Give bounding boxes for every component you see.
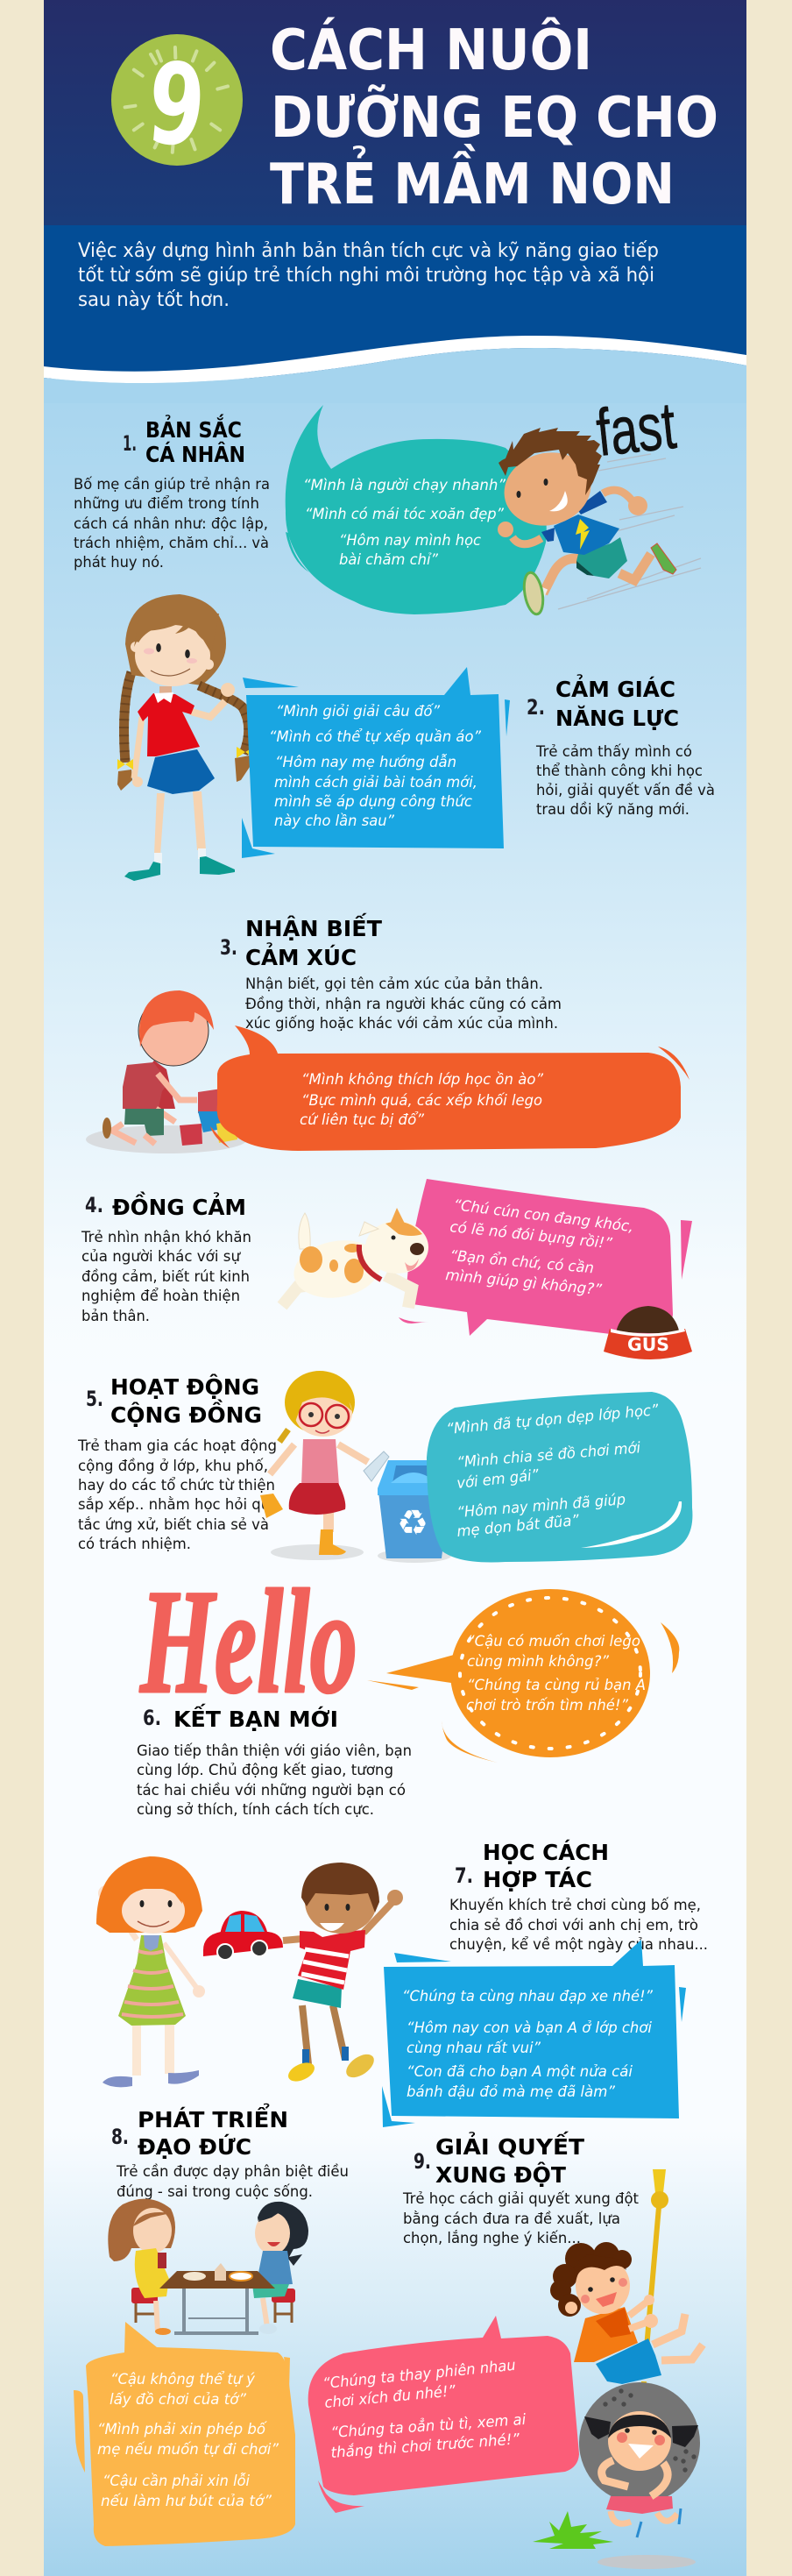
text block 2: hỏi, giải quyết vấn đề và xyxy=(536,781,715,799)
speech bubble pink: có lẽ nó đói bụng rồi!” xyxy=(449,1217,613,1253)
speech bubble amber: “Mình phải xin phép bố xyxy=(97,2420,268,2438)
illustration: running boy xyxy=(496,388,701,615)
speech bubble blue 2 xyxy=(382,1940,686,2127)
text block 6: tác hai chiều với những người bạn có xyxy=(137,1781,406,1799)
intro text: Việc xây dựng hình ảnh bản thân tích cực và kỹ năng giao tiếp xyxy=(78,240,659,262)
text block 4: của người khác với sự xyxy=(81,1248,241,1266)
title: TRẺ MẦM NON xyxy=(270,143,675,217)
text block 6: cùng sở thích, tính cách tích cực. xyxy=(137,1801,374,1819)
text block 9: Trẻ học cách giải quyết xung đột xyxy=(402,2189,639,2208)
heading 7 xyxy=(455,1840,609,1892)
speech bubble orange round: “Cậu có muốn chơi lego xyxy=(467,1632,640,1650)
badge: number 9 xyxy=(111,34,243,173)
text block 6 xyxy=(137,1742,412,1819)
text block 5: hay do các tổ chức từ thiện xyxy=(78,1476,275,1494)
speech bubble blue: “Mình giỏi giải câu đố” xyxy=(276,702,440,720)
text block 5: sắp xếp.. nhằm học hỏi quy xyxy=(78,1495,279,1514)
heading 8 xyxy=(111,2103,288,2160)
text block 7: chuyện, kể về một ngày của nhau... xyxy=(449,1935,708,1954)
heading 3: NHẬN BIẾT xyxy=(245,912,382,941)
text block 5: Trẻ tham gia các hoạt động xyxy=(77,1437,277,1455)
text block 5: cộng đồng ở lớp, khu phố, xyxy=(78,1457,268,1475)
heading 5: CỘNG ĐỒNG xyxy=(110,1399,262,1428)
speech bubble blue: mình cách giải bài toán mới, xyxy=(274,774,477,791)
text block 9: bằng cách đưa ra đề xuất, lựa xyxy=(403,2210,620,2228)
text block 1: những ưu điểm trong tính xyxy=(74,494,259,513)
speech bubble amber: mẹ nếu muốn tự đi chơi” xyxy=(97,2440,279,2459)
speech bubble red pink: “Chúng ta thay phiên nhau xyxy=(322,2357,517,2393)
speech bubble teal 2: với em gái” xyxy=(456,1466,540,1493)
speech bubble blue 2: “Con đã cho bạn A một nửa cái xyxy=(407,2063,633,2081)
speech bubble amber: “Cậu không thể tự ý xyxy=(110,2370,256,2388)
speech bubble teal 2: “Mình chia sẻ đồ chơi mới xyxy=(456,1438,641,1472)
illustration: dog bowl GUS: GUS xyxy=(627,1334,669,1355)
title xyxy=(270,17,718,217)
text block 1 xyxy=(74,475,270,571)
heading 5: 5. xyxy=(86,1387,103,1411)
speech bubble teal 2 xyxy=(427,1392,692,1562)
text block 5 xyxy=(77,1437,279,1553)
text block 7 xyxy=(449,1896,708,1954)
speech bubble amber: “Cậu cần phải xin lỗi xyxy=(103,2472,250,2490)
heading 4: 4. xyxy=(85,1193,103,1217)
panel: 1 ban sac ca nhan xyxy=(74,388,701,615)
text block 6: cùng lớp. Chủ động kết giao, tương xyxy=(137,1761,393,1779)
speech bubble teal: “Mình có mái tóc xoăn đẹp” xyxy=(305,506,504,523)
speech bubble teal 2: mẹ dọn bát đũa” xyxy=(456,1512,580,1541)
speech bubble pink xyxy=(399,1179,692,1338)
text block 2: trau dồi kỹ năng mới. xyxy=(536,800,689,819)
heading 3: CẢM XÚC xyxy=(245,941,357,970)
speech bubble blue: “Hôm nay mẹ hướng dẫn xyxy=(275,753,456,771)
speech bubble teal: bài chăm chỉ” xyxy=(339,551,438,569)
heading 2: CẢM GIÁC xyxy=(555,673,675,702)
illustration: boy with blocks xyxy=(86,990,247,1153)
text block 4: Trẻ nhìn nhận khó khăn xyxy=(81,1229,251,1246)
heading 8: PHÁT TRIỂN xyxy=(138,2103,288,2132)
heading 2: 2. xyxy=(527,695,545,720)
intro text xyxy=(78,240,659,311)
speech bubble pink: “Bạn ổn chứ, có cần xyxy=(449,1246,595,1277)
intro text: sau này tốt hơn. xyxy=(78,289,230,311)
speech bubble orange round: “Chúng ta cùng rủ bạn A xyxy=(467,1677,646,1694)
text block 2: Trẻ cảm thấy mình có xyxy=(535,742,692,761)
speech bubble orange round xyxy=(367,1589,679,1763)
heading 7: HỌC CÁCH xyxy=(483,1840,609,1865)
text block 4: bản thân. xyxy=(81,1308,150,1325)
text block 3: Nhận biết, gọi tên cảm xúc của bản thân. xyxy=(245,975,543,993)
text block 4: nghiệm để hoàn thiện xyxy=(81,1287,240,1305)
illustration: boy waving xyxy=(283,1863,403,2085)
speech bubble amber: lấy đồ chơi của tớ” xyxy=(110,2390,246,2409)
speech bubble red pink xyxy=(308,2316,579,2513)
title: DƯỠNG EQ CHO xyxy=(271,84,718,151)
heading 7: 7. xyxy=(455,1863,473,1888)
text block 8: Trẻ cần được dạy phân biệt điều xyxy=(116,2162,349,2181)
header band xyxy=(44,0,746,403)
speech bubble teal 2: “Mình đã tự dọn dẹp lớp học” xyxy=(446,1402,660,1438)
speech bubble orange: cứ liên tục bị đổ” xyxy=(300,1111,424,1129)
speech bubble blue 2: cùng nhau rất vui” xyxy=(407,2039,541,2057)
panel: 9 giai quyet xung dot xyxy=(308,2131,703,2569)
panel: 5 hoat dong cong dong xyxy=(77,1371,692,1563)
illustration: children on tire swing xyxy=(550,2169,703,2569)
heading 5 xyxy=(86,1373,262,1428)
heading 5: HOẠT ĐỘNG xyxy=(110,1373,259,1400)
speech bubble red pink: chơi xích đu nhé!” xyxy=(324,2382,456,2412)
speech bubble pink: mình giúp gì không?” xyxy=(445,1267,603,1299)
speech bubble amber: nếu làm hư bút của tớ” xyxy=(101,2492,272,2510)
text block 7: chia sẻ đồ chơi với anh chị em, trò xyxy=(449,1916,698,1934)
text block 1: phát huy nó. xyxy=(74,554,164,571)
speech bubble blue 2: “Hôm nay con và bạn A ở lớp chơi xyxy=(407,2019,652,2037)
heading 1: CÁ NHÂN xyxy=(145,442,245,467)
text block 1: Bố mẹ cần giúp trẻ nhận ra xyxy=(74,475,270,493)
speech bubble orange: “Bực mình quá, các xếp khối lego xyxy=(301,1091,542,1110)
panel: 7 hoc cach hop tac xyxy=(96,1840,708,2127)
speech bubble orange round: cùng mình không?” xyxy=(467,1653,609,1671)
speech bubble blue: “Mình có thể tự xếp quần áo” xyxy=(269,727,481,746)
heading 4: ĐỒNG CẢM xyxy=(112,1191,246,1220)
text block 6: Giao tiếp thân thiện với giáo viên, bạn xyxy=(137,1742,412,1760)
heading 6: KẾT BẠN MỚI xyxy=(173,1703,338,1732)
panel: 6 ket ban moi xyxy=(137,1559,679,1819)
illustration: recycling bin: ♻ xyxy=(397,1503,428,1543)
badge: number 9: 9 xyxy=(143,38,210,173)
text block 1: cách cá nhân như: độc lập, xyxy=(74,515,268,533)
illustration: grass xyxy=(533,2511,613,2549)
heading 6: 6. xyxy=(143,1706,161,1730)
panel: 4 dong cam xyxy=(81,1179,692,1359)
heading 7: HỢP TÁC xyxy=(483,1867,592,1892)
intro text: tốt từ sớm sẽ giúp trẻ thích nghi môi trường học tập và xã hội xyxy=(78,265,654,287)
text block 4: đồng cảm, biết rút kinh xyxy=(81,1267,250,1286)
heading 9: 9. xyxy=(414,2149,431,2174)
speech bubble teal: “Hôm nay mình học xyxy=(339,532,482,550)
illustration: toy car xyxy=(203,1911,283,1960)
speech bubble blue: mình sẽ áp dụng công thức xyxy=(274,793,473,811)
illustration: recycling bin xyxy=(378,1460,451,1563)
text block 8: đúng - sai trong cuộc sống. xyxy=(117,2182,313,2201)
heading 9 xyxy=(414,2131,584,2188)
infographic column background xyxy=(44,351,746,2576)
speech bubble teal: “Mình là người chạy nhanh” xyxy=(303,477,506,494)
illustration: dog bowl GUS xyxy=(604,1306,692,1359)
speech bubble orange: “Mình không thích lớp học ồn ào” xyxy=(301,1070,543,1089)
text block 5: tắc ứng xử, biết chia sẻ và xyxy=(78,1515,269,1534)
text block 9 xyxy=(402,2189,639,2247)
text block 1: trách nhiệm, chăm chỉ... và xyxy=(74,535,269,552)
heading 3: 3. xyxy=(220,935,237,960)
illustration: children at table xyxy=(108,2199,308,2335)
heading 1: 1. xyxy=(123,431,137,456)
lettering: fast: fast xyxy=(593,388,679,471)
speech bubble amber xyxy=(74,2322,295,2546)
heading 1: BẢN SẮC xyxy=(145,414,242,443)
heading 9: GIẢI QUYẾT xyxy=(435,2131,584,2160)
text block 3: Đồng thời, nhận ra người khác cũng có cảm xyxy=(245,995,562,1013)
heading 8: 8. xyxy=(111,2125,129,2149)
speech bubble blue xyxy=(242,667,510,858)
heading 8: ĐẠO ĐỨC xyxy=(138,2133,251,2160)
text block 5: có trách nhiệm. xyxy=(78,1536,191,1553)
text block 7: Khuyến khích trẻ chơi cùng bố mẹ, xyxy=(449,1896,701,1914)
heading 1 xyxy=(123,414,245,467)
heading 2 xyxy=(527,673,679,731)
speech bubble blue: này cho lần sau” xyxy=(274,812,394,830)
title: CÁCH NUÔI xyxy=(270,17,592,83)
text block 4 xyxy=(81,1229,251,1325)
illustration: dog xyxy=(282,1208,428,1308)
text block 2: thể thành công khi học xyxy=(536,762,703,780)
lettering: Hello: Hello xyxy=(139,1559,357,1724)
speech bubble teal 2: “Hôm nay mình đã giúp xyxy=(456,1491,626,1522)
illustration: girl waving xyxy=(96,1856,205,2087)
panel: 3 nhan biet cam xuc xyxy=(86,912,689,1153)
text block 9: chọn, lắng nghe ý kiến... xyxy=(403,2229,581,2247)
heading 3 xyxy=(220,912,382,970)
text block 3: xúc giống hoặc khác với cảm xúc của mình. xyxy=(245,1014,558,1033)
speech bubble blue 2: bánh đậu đỏ mà mẹ đã làm” xyxy=(407,2083,615,2101)
speech bubble teal xyxy=(286,405,547,614)
speech bubble blue 2: “Chúng ta cùng nhau đạp xe nhé!” xyxy=(402,1988,653,2005)
text block 2 xyxy=(535,742,715,819)
text block 8 xyxy=(116,2162,349,2201)
panel: 2 cam giac nang luc xyxy=(117,594,715,881)
heading 2: NĂNG LỰC xyxy=(555,705,679,731)
speech bubble orange xyxy=(210,1025,689,1151)
panel: 8 phat trien dao duc xyxy=(74,2103,349,2546)
speech bubble red pink: thắng thì chơi trước nhé!” xyxy=(330,2430,520,2462)
illustration: girl with braids xyxy=(117,594,254,881)
speech bubble orange round: chơi trò trốn tìm nhé!” xyxy=(466,1696,628,1714)
heading 9: XUNG ĐỘT xyxy=(435,2161,566,2188)
speech bubble pink: “Chú cún con đang khóc, xyxy=(452,1196,634,1236)
speech bubble red pink: “Chúng ta oẳn tù tì, xem ai xyxy=(330,2410,527,2442)
text block 3 xyxy=(245,975,562,1033)
illustration: girl recycling xyxy=(260,1371,389,1560)
